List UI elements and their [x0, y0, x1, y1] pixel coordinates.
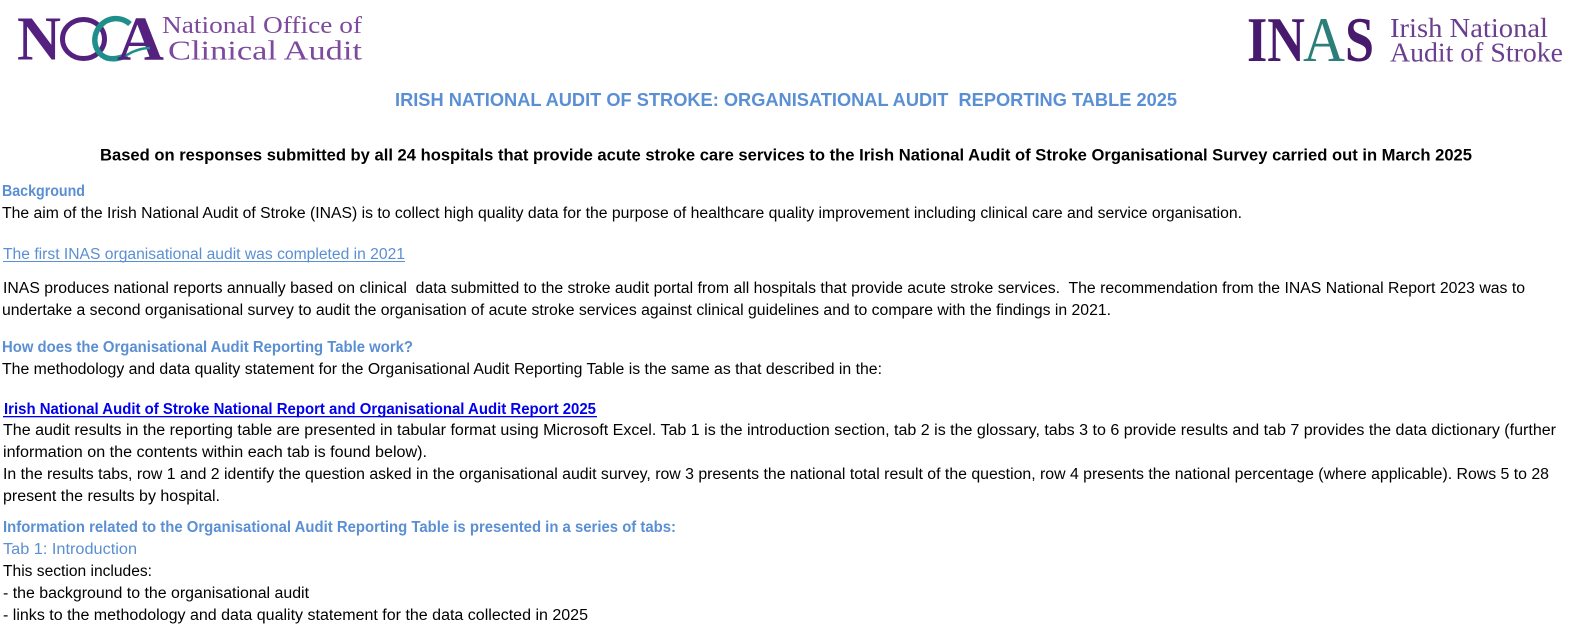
- logo: Irish National Audit of Stroke: Irish National: [1390, 13, 1548, 43]
- text: national reports paragraph: undertake a second organisational survey to audit the organisation of acute stroke services against clinical guidelines and to compare with the findings in 2021.: [2, 302, 1111, 319]
- list item: background: - the background to the organisational audit: [3, 585, 310, 602]
- text: aim of the audit: The aim of the Irish National Audit of Stroke (INAS) is to collect high quality data for the purpose of healthcare quality improvement including clinical care and service organisation.: [2, 205, 1242, 222]
- logo: National Office of Clinical Audit: Clinical Audit: [168, 36, 363, 66]
- logo: National Office of Clinical Audit: N: [17, 6, 61, 74]
- link: national report: Irish National Audit of Stroke National Report and Organisational Audit Report 2025: [4, 401, 596, 418]
- text: reporting table description: present the results by hospital.: [3, 488, 220, 505]
- logo: National Office of Clinical Audit: [17, 6, 363, 74]
- logo: Irish National Audit of Stroke: A: [1303, 4, 1345, 75]
- logo: Irish National Audit of Stroke: [1247, 4, 1563, 75]
- text: national reports paragraph: INAS produces national reports annually based on clinical data submitted to the stroke audit portal from all hospitals that provide acute stroke services. The recommendation from the INAS National Report 2023 was to: [3, 280, 1525, 297]
- text: reporting table description: In the results tabs, row 1 and 2 identify the question asked in the organisational audit survey, row 3 presents the national total result of the question, row 4 presents the national percentage (where applicable). Rows 5 to 28: [3, 466, 1549, 483]
- text: methodology statement: The methodology and data quality statement for the Organisational Audit Reporting Table is the same as that described in the:: [2, 361, 882, 378]
- section: how the table works: [2, 339, 1556, 505]
- logo: National Office of Clinical Audit: National Office of: [162, 13, 362, 39]
- subtitle: Based on responses submitted by all 24 hospitals that provide acute stroke care services to the Irish National Audit of Stroke Organisational Survey carried out in March 2025: [100, 146, 1472, 164]
- list item: links: - links to the methodology and data quality statement for the data collected in 2025: [3, 607, 588, 624]
- text: reporting table description: The audit results in the reporting table are presented in tabular format using Microsoft Excel. Tab 1 is the introduction section, tab 2 is the glossary, tabs 3 to 6 provide results and tab 7 provides the data dictionary (further: [3, 422, 1556, 439]
- section: background: [2, 183, 1525, 319]
- logo: Irish National Audit of Stroke: IN: [1247, 4, 1305, 75]
- text: reporting table description: [3, 422, 1556, 505]
- subheading: tab 1: Tab 1: Introduction: [3, 541, 137, 558]
- text: section includes: This section includes:: [3, 563, 152, 580]
- heading: background: Background: [2, 183, 85, 200]
- section: tabs information: [3, 519, 676, 624]
- logo: National Office of Clinical Audit: A: [117, 6, 164, 74]
- heading: tabs information: Information related to the Organisational Audit Reporting Table is presented in a series of tabs:: [3, 519, 676, 536]
- text: national reports paragraph: [2, 280, 1525, 319]
- logo: Irish National Audit of Stroke: S: [1345, 4, 1374, 75]
- logo: Irish National Audit of Stroke: Audit of Stroke: [1390, 38, 1563, 68]
- link: first organisational audit: The first INAS organisational audit was completed in 2021: [3, 246, 405, 263]
- heading: how the table works: How does the Organisational Audit Reporting Table work?: [2, 339, 413, 356]
- title: IRISH NATIONAL AUDIT OF STROKE: ORGANISATIONAL AUDIT REPORTING TABLE 2025: [395, 90, 1177, 110]
- text: reporting table description: information on the contents within each tab is found below).: [3, 444, 427, 461]
